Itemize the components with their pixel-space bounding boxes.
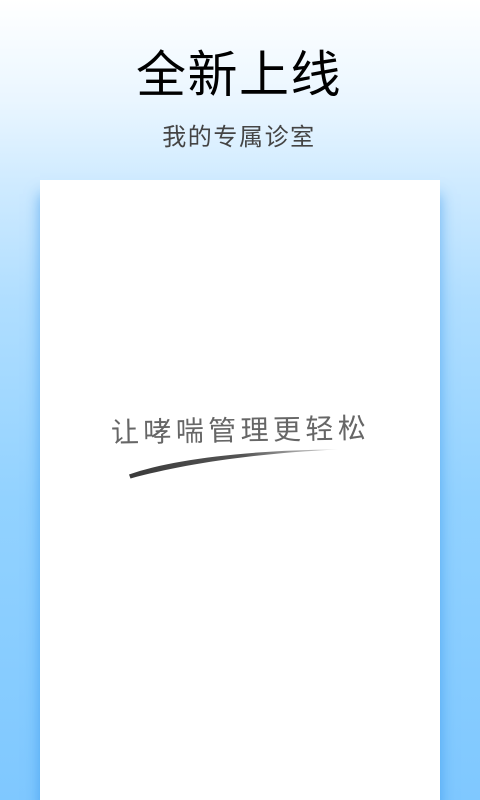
subtitle: 我的专属诊室 <box>162 124 316 151</box>
handwritten slogan: 让哮喘管理更轻松 <box>111 413 370 448</box>
brush stroke underline <box>129 450 335 478</box>
panel: white card <box>40 180 440 800</box>
title: 全新上线 <box>136 47 342 103</box>
